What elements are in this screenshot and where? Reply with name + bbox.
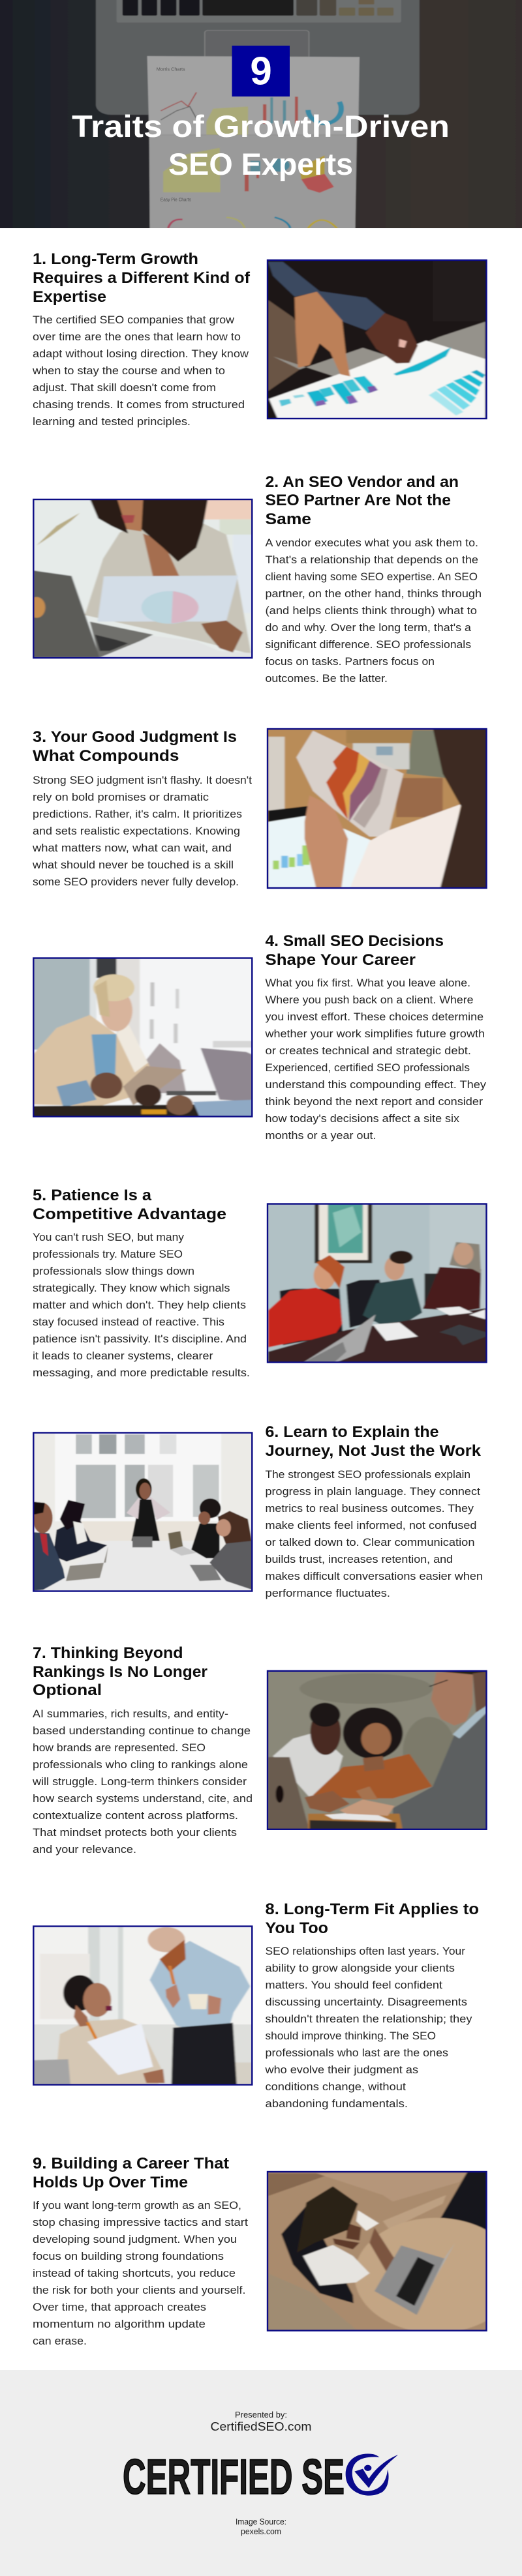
body text 2: outcomes. Be the latter. <box>265 672 388 685</box>
hero background photo: laptop and printed charts <box>0 0 522 228</box>
body text 1: chasing trends. It comes from structured <box>33 398 245 411</box>
image source credit: pexels.com <box>241 2526 281 2536</box>
body text 3: rely on bold promises or dramatic <box>33 791 209 803</box>
heading 9: 9. Building a Career That <box>33 2155 229 2172</box>
body text 8: ability to grow alongside your clients <box>265 1962 455 1974</box>
body text 4: Experienced, certified SEO professionals <box>265 1061 470 1074</box>
heading 2: SEO Partner Are Not the <box>265 492 451 509</box>
heading 4: Shape Your Career <box>265 951 416 969</box>
body text 6: progress in plain language. They connect <box>265 1485 480 1498</box>
body text 7: AI summaries, rich results, and entity- <box>33 1708 228 1720</box>
body text 2: That's a relationship that depends on the <box>265 554 478 566</box>
body text 7 <box>32 1708 253 1856</box>
body text 8: abandoning fundamentals. <box>265 2097 408 2110</box>
body text 5: professionals try. Mature SEO <box>33 1248 183 1260</box>
heading 5: Competitive Advantage <box>33 1206 226 1223</box>
body text 3: Strong SEO judgment isn't flashy. It doesn't <box>33 774 252 786</box>
heading 8: You Too <box>265 1919 328 1937</box>
body text 8: shouldn't threaten the relationship; they <box>265 2013 472 2025</box>
heading 9: Holds Up Over Time <box>33 2174 188 2191</box>
hero background photo: laptop and printed charts: Morris Charts <box>157 67 185 72</box>
body text 2: significant difference. SEO professionals <box>265 638 471 651</box>
photo: hands pointing at bar chart <box>253 250 502 428</box>
body text 5: stay focused instead of reactive. This <box>33 1316 224 1328</box>
body text 5: it leads to cleaner systems, clearer <box>33 1350 213 1362</box>
heading 6: Journey, Not Just the Work <box>265 1442 482 1460</box>
photo: team meeting in bright office <box>20 1423 266 1599</box>
photo: woman holding pie chart at laptop <box>20 491 266 667</box>
photo: two colleagues discussing by window <box>20 1917 266 2094</box>
panel: section 3 <box>32 719 502 898</box>
body text 8: professionals who last are the ones <box>265 2047 448 2059</box>
body text 7: will struggle. Long-term thinkers consider <box>32 1775 247 1788</box>
body text 4: think beyond the next report and consider <box>265 1095 483 1108</box>
body text 2: focus on tasks. Partners focus on <box>265 655 435 668</box>
body text 8 <box>264 1945 472 2110</box>
panel: section 9 <box>33 2155 517 2347</box>
body text 1 <box>32 314 249 428</box>
title: SEO Experts <box>168 147 353 181</box>
body text 9: focus on building strong foundations <box>33 2250 224 2262</box>
body text 7: based understanding continue to change <box>33 1725 251 1737</box>
body text 4: or creates technical and strategic debt. <box>265 1044 471 1057</box>
body text 9 <box>33 2199 248 2347</box>
body text 6: makes difficult conversations easier when <box>265 1570 483 1582</box>
photo: couple with adviser reviewing papers <box>253 1663 502 1839</box>
hero banner <box>0 0 522 237</box>
body text 5: patience isn't passivity. It's discipline. And <box>33 1333 247 1345</box>
heading 1: Expertise <box>33 288 106 306</box>
body text 2 <box>265 537 482 685</box>
body text 8: conditions change, without <box>265 2080 406 2093</box>
heading 8 <box>265 1901 479 1937</box>
heading 5 <box>33 1187 226 1223</box>
body text 8: who evolve their judgment as <box>264 2064 418 2076</box>
body text 9: instead of taking shortcuts, you reduce <box>33 2267 236 2279</box>
body text 3: what should never be touched is a skill <box>32 859 234 871</box>
body text 5: professionals slow things down <box>33 1265 194 1277</box>
heading 1: Requires a Different Kind of <box>33 269 251 287</box>
heading 7: Optional <box>33 1681 102 1699</box>
body text 2: A vendor executes what you ask them to. <box>265 537 478 549</box>
heading 2: Same <box>265 511 311 528</box>
body text 6 <box>265 1468 483 1599</box>
body text 7: professionals who cling to rankings alone <box>33 1758 248 1771</box>
body text 3: predictions. Rather, it's calm. It prioritizes <box>33 808 242 820</box>
body text 9: developing sound judgment. When you <box>33 2233 237 2245</box>
body text 9: If you want long-term growth as an SEO, <box>33 2199 241 2212</box>
footer panel <box>0 2370 522 2576</box>
heading 3: What Compounds <box>33 747 179 765</box>
body text 5: You can't rush SEO, but many <box>33 1231 185 1243</box>
body text 2: partner, on the other hand, thinks through <box>265 587 482 600</box>
body text 8: matters. You should feel confident <box>265 1979 442 1991</box>
panel: section 1 <box>32 250 502 428</box>
image source credit <box>236 2517 286 2536</box>
panel: section 2 <box>20 473 482 685</box>
body text 3: and sets realistic expectations. Knowing <box>33 825 240 837</box>
body text 1: learning and tested principles. <box>33 415 191 428</box>
body text 5 <box>33 1231 250 1379</box>
body text 7: how search systems understand, cite, and <box>33 1792 253 1805</box>
body text 9: can erase. <box>33 2335 87 2347</box>
number badge: 9 <box>250 50 272 93</box>
body text 3: what matters now, what can wait, and <box>32 842 232 854</box>
body text 6: metrics to real business outcomes. They <box>265 1502 474 1515</box>
title: Traits of Growth-Driven <box>72 109 450 143</box>
heading 7 <box>33 1644 207 1699</box>
heading 7: 7. Thinking Beyond <box>33 1644 183 1662</box>
body text 9: Over time, that approach creates <box>33 2301 206 2313</box>
panel: section 5 <box>33 1187 502 1379</box>
heading 3: 3. Your Good Judgment Is <box>33 728 237 746</box>
presented by credit: CertifiedSEO.com <box>210 2420 312 2433</box>
body text 4: how today's decisions affect a site six <box>265 1112 460 1125</box>
body text 2: do and why. Over the long term, that's a <box>265 621 472 634</box>
body text 4: you invest effort. These choices determine <box>265 1011 484 1023</box>
body text 3 <box>32 774 252 888</box>
body text 8: discussing uncertainty. Disagreements <box>265 1996 467 2008</box>
body text 5: matter and which don't. They help clients <box>33 1299 246 1311</box>
body text 4: Where you push back on a client. Where <box>265 994 474 1006</box>
number badge <box>232 46 290 96</box>
body text 7: contextualize content across platforms. <box>33 1809 238 1822</box>
heading 6 <box>265 1423 482 1460</box>
heading 4: 4. Small SEO Decisions <box>265 932 444 950</box>
body text 4: months or a year out. <box>265 1129 376 1142</box>
heading 6: 6. Learn to Explain the <box>265 1423 438 1441</box>
body text 6: make clients feel informed, not confused <box>265 1519 476 1532</box>
heading 1: 1. Long-Term Growth <box>33 250 198 268</box>
body text 6: performance fluctuates. <box>265 1587 390 1599</box>
body text 1: when to stay the course and when to <box>32 364 225 377</box>
heading 8: 8. Long-Term Fit Applies to <box>265 1901 479 1918</box>
body text 1: adjust. That skill doesn't come from <box>33 381 216 394</box>
title <box>72 109 450 181</box>
body text 9: momentum no algorithm update <box>33 2318 206 2330</box>
body text 6: or talked down to. Clear communication <box>265 1536 475 1548</box>
body text 1: The certified SEO companies that grow <box>33 314 235 326</box>
heading 9 <box>33 2155 229 2191</box>
body text 3: some SEO providers never fully develop. <box>33 876 239 888</box>
body text 2: client having some SEO expertise. An SEO <box>265 570 478 583</box>
body text 7: That mindset protects both your clients <box>33 1826 237 1839</box>
body text 8: should improve thinking. The SEO <box>265 2030 436 2042</box>
photo: woman at laptop from above <box>253 2163 517 2341</box>
photo: three women at conference table <box>253 1195 502 1371</box>
body text 1: adapt without losing direction. They know <box>33 348 249 360</box>
body text 4: What you fix first. What you leave alone. <box>265 977 470 989</box>
heading 2 <box>265 473 459 528</box>
presented by credit <box>210 2410 312 2433</box>
heading 2: 2. An SEO Vendor and an <box>265 473 459 491</box>
body text 4: understand this compounding effect. They <box>265 1078 487 1091</box>
body text 2: (and helps clients think through) what to <box>265 604 477 617</box>
heading 1 <box>33 250 251 306</box>
body text 4 <box>264 977 487 1142</box>
body text 7: how brands are represented. SEO <box>33 1741 206 1754</box>
panel: section 4 <box>20 932 487 1142</box>
hero background photo: laptop and printed charts: Easy Pie Charts <box>161 197 191 203</box>
body text 6: The strongest SEO professionals explain <box>265 1468 470 1481</box>
photo: blonde woman with clipboard <box>20 950 266 1126</box>
body text 7: and your relevance. <box>33 1843 136 1856</box>
image source credit: Image Source: <box>236 2517 286 2526</box>
body text 1: over time are the ones that learn how to <box>33 331 241 343</box>
photo: woman reading printed area chart <box>253 719 502 898</box>
body text 4: whether your work simplifies future growth <box>264 1028 485 1040</box>
presented by credit: Presented by: <box>235 2410 287 2420</box>
heading 3 <box>33 728 237 765</box>
body text 5: messaging, and more predictable results. <box>33 1367 250 1379</box>
body text 9: stop chasing impressive tactics and start <box>33 2216 248 2228</box>
panel: section 8 <box>20 1901 479 2110</box>
heading 7: Rankings Is No Longer <box>33 1663 207 1681</box>
heading 4 <box>265 932 444 969</box>
heading 5: 5. Patience Is a <box>33 1187 152 1204</box>
body text 5: strategically. They know which signals <box>33 1282 230 1294</box>
body text 8: SEO relationships often last years. Your <box>265 1945 465 1957</box>
panel: section 6 <box>20 1423 483 1599</box>
panel: section 7 <box>32 1644 502 1856</box>
body text 6: builds trust, increases retention, and <box>265 1553 453 1565</box>
logo: Certified SEO wordmark and check emblem: CERTIFIED SE <box>123 2450 345 2505</box>
body text 9: the risk for both your clients and yourself. <box>33 2284 245 2296</box>
